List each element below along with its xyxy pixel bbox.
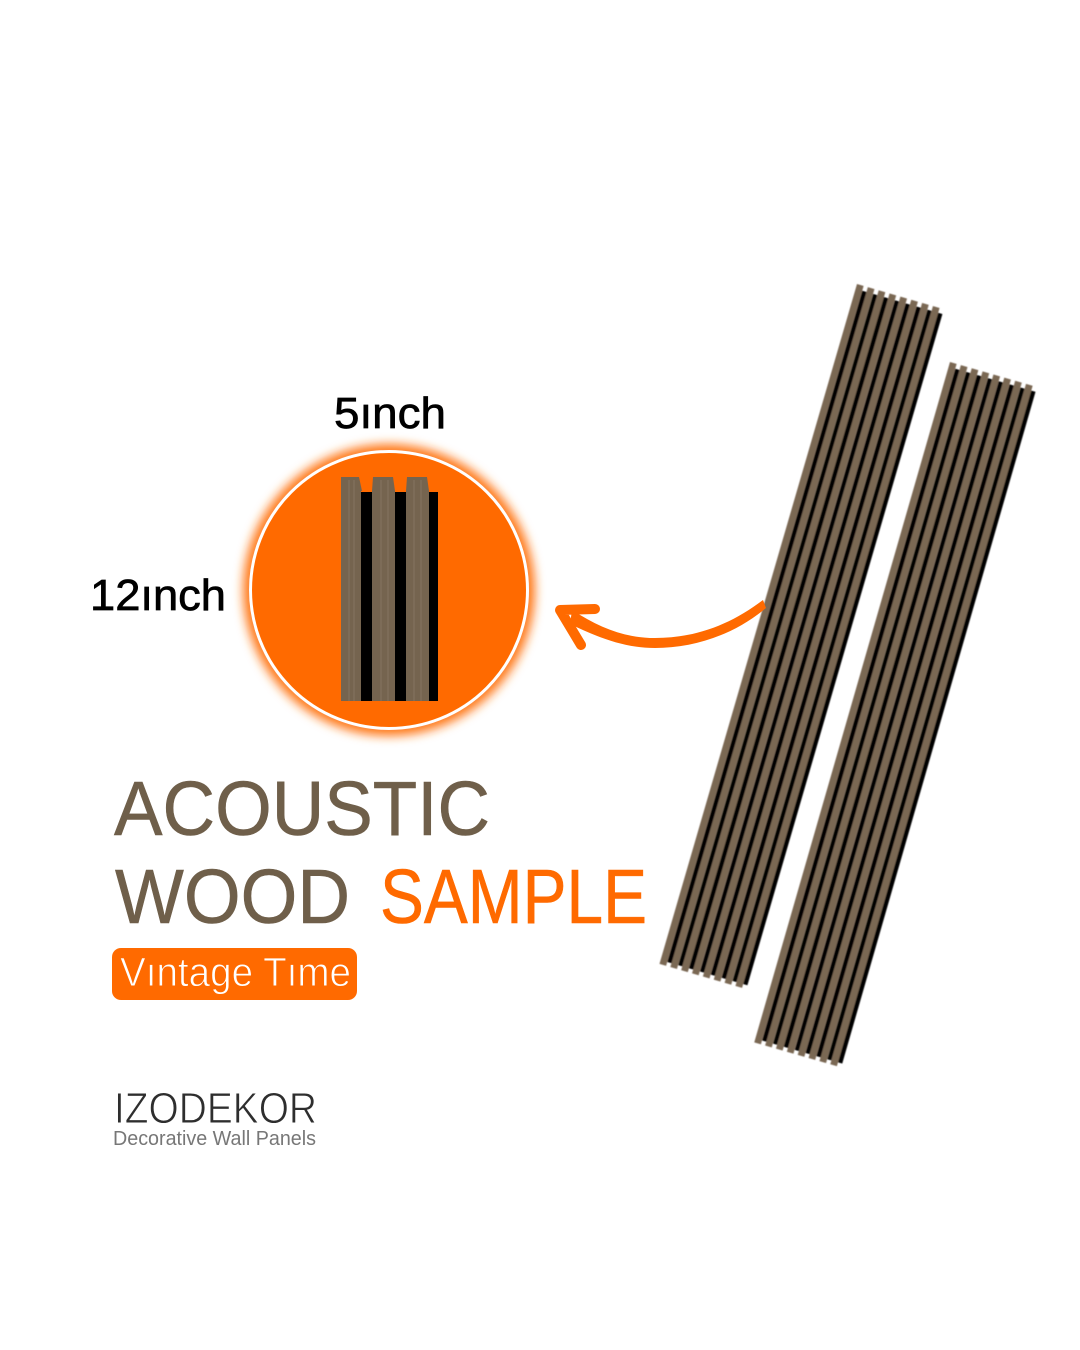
- title word: SAMPLE: SAMPLE: [380, 854, 647, 940]
- orange disc with white ring: [250, 452, 528, 728]
- logo: brand name and tagline: [113, 1084, 317, 1150]
- title: line one: ACOUSTIC: [114, 766, 490, 852]
- wood panel: right slatted panel: [754, 362, 1037, 1067]
- circle glow: [243, 444, 535, 736]
- wood panel: left slatted panel: [659, 284, 944, 989]
- dimension label: width: 5ınch: [334, 389, 446, 438]
- arrow: from panel to sample circle: [560, 600, 766, 648]
- wood sample swatch: [341, 477, 438, 701]
- title word: WOOD: WOOD: [115, 854, 350, 940]
- dimension label: height: 12ınch: [90, 571, 226, 620]
- badge: finish name: Vıntage Tıme: [120, 949, 351, 995]
- title: line two: [115, 854, 647, 940]
- logo: brand name and tagline: Decorative Wall Panels: [113, 1128, 316, 1150]
- logo: brand name and tagline: IZODEKOR: [114, 1084, 317, 1133]
- sample circle: [243, 444, 535, 736]
